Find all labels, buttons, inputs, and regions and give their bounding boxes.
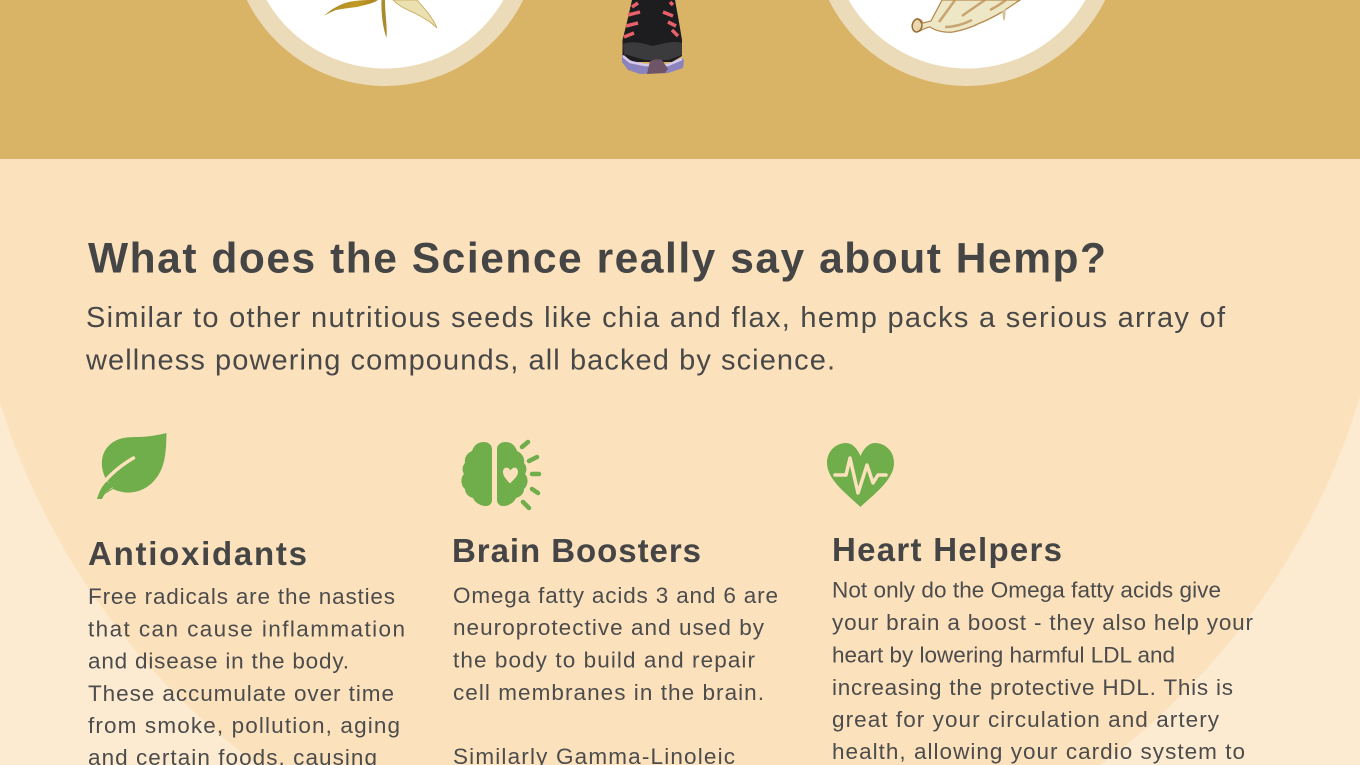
icon: running shoe: [622, 0, 684, 74]
panel: antioxidants: [88, 433, 405, 765]
body text: cell membranes in the brain.: [453, 680, 764, 705]
heading: Antioxidants: [88, 535, 307, 572]
body text: [453, 583, 778, 765]
body text: [832, 578, 1254, 764]
body text: health, allowing your cardio system to: [832, 739, 1245, 764]
body text: from smoke, pollution, aging: [88, 713, 400, 738]
body text: increasing the protective HDL. This is: [832, 675, 1233, 700]
hemp leaf circle: [231, 0, 539, 86]
body text: [88, 584, 405, 765]
panel: heart helpers: [827, 443, 1254, 764]
body text: the body to build and repair: [453, 648, 756, 672]
body text: Free radicals are the nasties: [88, 584, 395, 609]
body text: that can cause inflammation: [88, 616, 405, 641]
panel: brain boosters: [452, 442, 778, 765]
body text: your brain a boost - they also help your: [832, 610, 1254, 635]
intro text: Similar to other nutritious seeds like chia and flax, hemp packs a serious array of: [86, 302, 1226, 334]
body text: great for your circulation and artery: [832, 707, 1220, 732]
body text: and disease in the body.: [88, 649, 349, 674]
heading: Heart Helpers: [832, 531, 1062, 568]
body text: These accumulate over time: [88, 681, 394, 706]
intro text: wellness powering compounds, all backed by science.: [85, 344, 835, 376]
icon: heart with pulse: [827, 443, 894, 507]
intro text: [85, 302, 1226, 376]
heading: Brain Boosters: [452, 532, 701, 569]
capsule circle: [813, 0, 1121, 86]
icon: hemp leaf: [324, 0, 437, 38]
icon: green leaf: [97, 433, 166, 499]
title: What does the Science really say about Hemp?: [88, 236, 1106, 282]
body text: neuroprotective and used by: [453, 615, 765, 640]
body text: heart by lowering harmful LDL and: [832, 642, 1175, 668]
icon: oil capsule: [912, 0, 1020, 32]
body text: Not only do the Omega fatty acids give: [832, 578, 1221, 602]
body text: Omega fatty acids 3 and 6 are: [453, 583, 778, 608]
icon: brain with heart: [461, 442, 539, 508]
top gold band: [0, 0, 1360, 159]
